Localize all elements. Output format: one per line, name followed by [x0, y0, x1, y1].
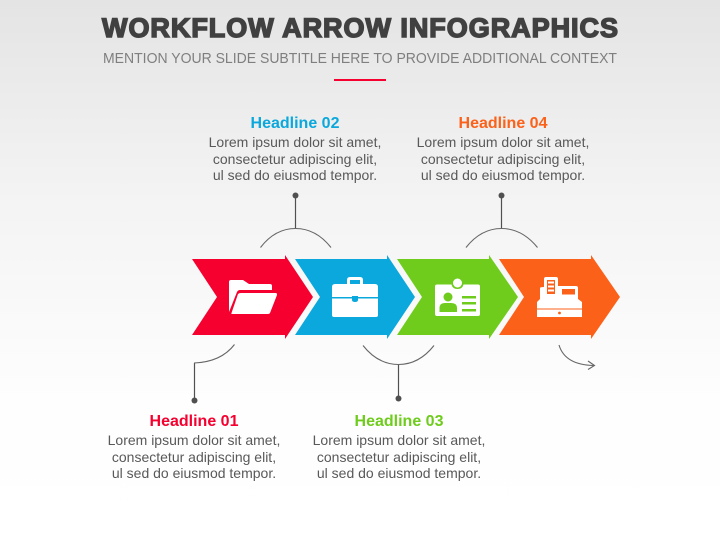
connector: headline 03 — [363, 346, 434, 402]
arrow 1: red chevron — [192, 255, 313, 339]
title: WORKFLOW ARROW INFOGRAPHICS — [102, 13, 618, 43]
text block: headline 01: ul sed do eiusmod tempor. — [112, 465, 276, 481]
text block: headline 01 — [108, 413, 280, 481]
text block: headline 04: Lorem ipsum dolor sit amet, — [417, 134, 589, 150]
text block: headline 03: Headline 03 — [355, 413, 444, 430]
text block: headline 02: Lorem ipsum dolor sit amet, — [209, 134, 381, 150]
text block: headline 04 — [417, 115, 589, 183]
text block: headline 04: Headline 04 — [459, 115, 548, 132]
arrow 2: blue chevron — [295, 255, 415, 339]
text block: headline 04: ul sed do eiusmod tempor. — [421, 167, 585, 183]
text block: headline 03: Lorem ipsum dolor sit amet, — [313, 432, 485, 448]
title underline — [334, 79, 386, 81]
text block: headline 01: consectetur adipiscing elit, — [112, 449, 276, 465]
text block: headline 03: consectetur adipiscing elit, — [317, 449, 481, 465]
connector: headline 04 — [466, 192, 538, 248]
text block: headline 02: ul sed do eiusmod tempor. — [213, 167, 377, 183]
text block: headline 02: Headline 02 — [251, 115, 340, 132]
arrow 3: green chevron — [397, 255, 518, 339]
connector: headline 01 — [192, 344, 234, 404]
text block: headline 02: consectetur adipiscing elit, — [213, 151, 377, 167]
text block: headline 04: consectetur adipiscing elit, — [421, 151, 585, 167]
text block: headline 01: Headline 01 — [150, 413, 239, 430]
icon: briefcase — [332, 278, 378, 317]
subtitle: MENTION YOUR SLIDE SUBTITLE HERE TO PROVIDE ADDITIONAL CONTEXT — [103, 51, 617, 67]
arrow: exit connector — [559, 345, 594, 370]
text block: headline 03 — [313, 413, 485, 481]
arrow 4: orange chevron — [499, 255, 620, 339]
icon: folder — [229, 280, 277, 314]
icon: id badge — [435, 278, 480, 316]
text block: headline 01: Lorem ipsum dolor sit amet, — [108, 432, 280, 448]
text block: headline 03: ul sed do eiusmod tempor. — [317, 465, 481, 481]
text block: headline 02 — [209, 115, 381, 183]
connector: headline 02 — [260, 192, 331, 248]
icon: cash register — [537, 277, 582, 317]
